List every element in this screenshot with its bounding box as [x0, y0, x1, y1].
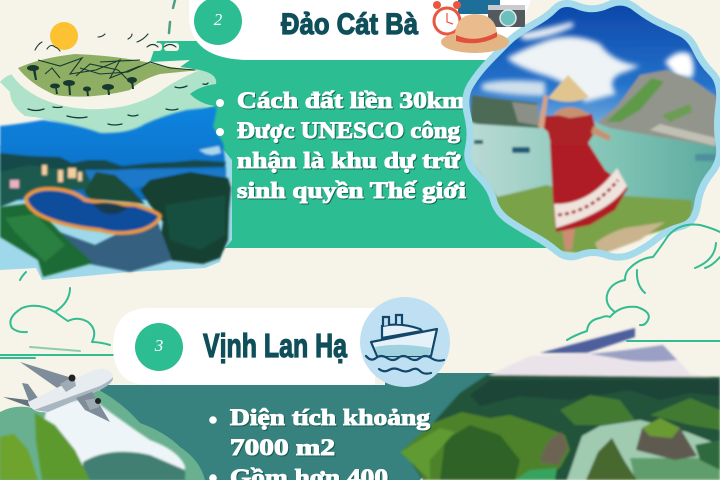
badge number 2 [194, 0, 242, 45]
decoration: cloud outline right [567, 224, 720, 340]
lake hill reflection [92, 203, 128, 214]
badge number 3 [135, 323, 183, 371]
upper wing [20, 362, 80, 392]
rock: large karst [636, 418, 697, 460]
skirt [550, 143, 628, 232]
sun [50, 22, 78, 50]
line: area: Diện tích khoảng [230, 405, 431, 430]
icon: ship in circle [360, 297, 450, 387]
bodice [540, 114, 596, 145]
line: reserve: nhận là khu dự trữ [237, 148, 461, 173]
badge number 2: 2 [214, 10, 223, 29]
water ripples [28, 83, 208, 125]
ship body [371, 329, 437, 356]
light cloud patch [199, 146, 221, 155]
photo: Cat Ba town at dusk [0, 107, 232, 280]
heading: Vịnh Lan Hạ [203, 327, 347, 364]
map [458, 0, 500, 14]
boats [474, 140, 717, 161]
rock: left karst [540, 432, 568, 465]
small white clouds on panel corner [148, 43, 179, 51]
text block: Cat Ba facts [216, 88, 467, 203]
cabin [382, 325, 422, 338]
funnels [383, 315, 402, 326]
ship hull tint [375, 345, 431, 356]
dashed route line [169, 0, 175, 33]
line: UNESCO: Được UNESCO công [237, 118, 461, 143]
left forest [0, 203, 93, 277]
skirt hem [554, 168, 627, 228]
fuselage shadow [34, 377, 113, 412]
lower engine [85, 398, 99, 410]
dark green water [630, 458, 720, 480]
dirt path [595, 222, 665, 255]
header: Vinh Lan Ha white pill [113, 308, 375, 385]
clouds [482, 22, 694, 102]
wing shaped cloud [540, 328, 635, 353]
bay water [567, 420, 720, 480]
distant blue-green mountain [83, 452, 185, 480]
alarm clock [433, 1, 461, 34]
tail plane [3, 397, 30, 407]
icon: travel items [433, 0, 525, 53]
camera [488, 5, 525, 27]
pill shape [113, 308, 375, 385]
town neighbourhood [20, 200, 172, 272]
far ridges [470, 380, 720, 406]
sea and sky [0, 107, 226, 200]
lit islands [400, 395, 720, 480]
illustration: tropical island with sun and birds [0, 22, 216, 136]
lower wing [76, 392, 110, 422]
forest mass [403, 375, 720, 480]
near mountain [35, 413, 90, 480]
water [460, 122, 720, 212]
haze cloud [487, 346, 720, 395]
panel: Dao Cat Ba green background [148, 41, 560, 248]
bullets [209, 416, 217, 480]
straw hat [441, 14, 509, 53]
decoration: small line below left photo [20, 272, 26, 280]
green lagoon [515, 468, 557, 480]
header: Dao Cat Ba white pill [189, 0, 545, 60]
text block: Lan Ha facts [209, 405, 431, 480]
sand [10, 56, 200, 109]
decoration: cloud outline left [10, 288, 110, 345]
photo: woman in red dress overlooking the bay [460, 0, 720, 257]
mid water [85, 170, 226, 188]
decoration: left plane trails [0, 347, 113, 358]
wavy border [466, 2, 720, 257]
tail fin [22, 383, 38, 404]
right shore [695, 440, 720, 470]
birds [35, 34, 176, 51]
dark cloud [590, 345, 677, 362]
pill shape [189, 0, 545, 60]
right mountain [597, 70, 720, 147]
fuselage [28, 369, 112, 412]
decoration: cloud curl far right [695, 243, 720, 268]
conical hat [548, 75, 589, 102]
bullets [216, 99, 224, 136]
central hill [84, 172, 145, 204]
legs [562, 228, 575, 250]
island forest [18, 54, 200, 97]
line: distance: Cách đất liền 30km [237, 88, 465, 113]
lake with lit shore [26, 189, 160, 233]
sky [469, 6, 716, 124]
pale water [0, 70, 216, 136]
left cliff [470, 95, 540, 128]
line: biosphere: sinh quyền Thế giới [237, 178, 467, 203]
panel: Vinh Lan Ha teal background [100, 373, 500, 480]
left mountain [0, 434, 38, 480]
rock: small karst [586, 438, 637, 480]
heading: Đảo Cát Bà [281, 8, 418, 41]
photo: aerial view of Lan Ha Bay [400, 328, 720, 480]
sky and clouds [42, 397, 185, 480]
foreground grass [473, 163, 692, 255]
torn light-blue backing [0, 145, 232, 280]
badge number 3: 3 [154, 336, 163, 355]
waves [366, 356, 444, 374]
icon: airplane [3, 362, 113, 422]
right forest [140, 172, 231, 264]
shoulders and arms [553, 107, 590, 118]
line: area value: 7000 m2 [230, 435, 335, 460]
green blob [0, 387, 205, 480]
top engine [60, 376, 76, 392]
decoration: right plane trail [627, 340, 720, 342]
palm trees [27, 65, 137, 96]
town strip [0, 165, 90, 207]
distant hills [0, 153, 226, 172]
photo: green framed mountain scene [0, 387, 205, 480]
distant town lights [10, 165, 82, 188]
